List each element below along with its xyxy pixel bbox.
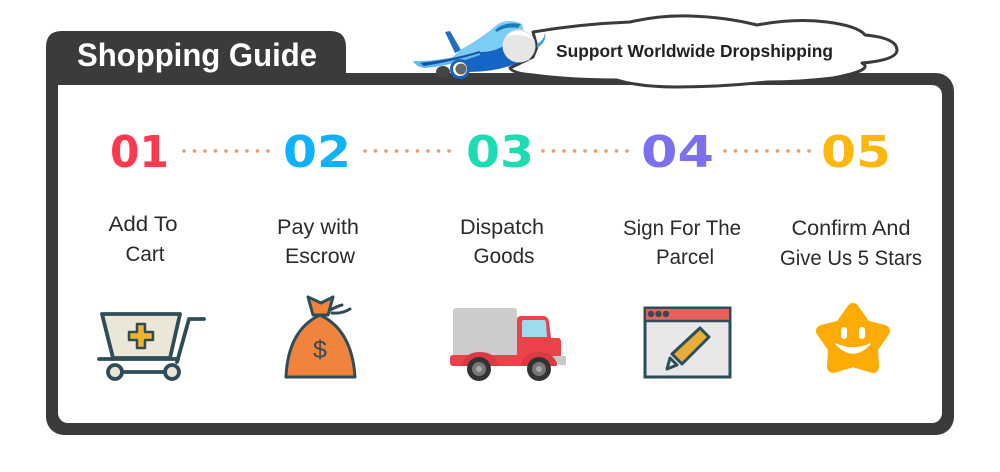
step 2 label — [277, 216, 359, 268]
step 5 label: Confirm And — [792, 217, 910, 240]
step 2 label: Pay with — [277, 216, 359, 239]
icon: delivery truck — [450, 308, 566, 381]
step 4 label: Sign For The — [623, 217, 741, 240]
step 1 label: Add To — [108, 213, 178, 236]
step 5 label — [780, 217, 922, 270]
step number 05: 05 — [821, 127, 891, 178]
icon: money bag: $ — [313, 336, 327, 364]
dotted connectors between steps — [184, 149, 811, 153]
step 3 label — [460, 216, 544, 268]
step 2 label: Escrow — [285, 245, 356, 268]
step number 02: 02 — [283, 127, 351, 178]
step 3 label: Goods — [474, 245, 534, 268]
panel: shopping guide frame — [46, 31, 954, 435]
step 3 label: Dispatch — [460, 216, 544, 239]
step number 01: 01 — [110, 127, 169, 178]
icon: airplane — [413, 21, 545, 79]
heading tab: Shopping Guide — [77, 37, 317, 73]
icon: shopping cart — [99, 314, 204, 379]
step 1 label — [108, 213, 178, 266]
icon: smiling star — [822, 309, 884, 367]
icon: money bag — [286, 297, 355, 377]
icon: browser window with pencil — [645, 308, 730, 377]
callout: cloud speech bubble — [510, 16, 897, 87]
step number 03: 03 — [466, 127, 534, 178]
heading tab — [46, 31, 358, 99]
step 4 label — [623, 217, 741, 269]
step 4 label: Parcel — [656, 246, 714, 269]
step 1 label: Cart — [126, 243, 165, 266]
callout: cloud speech bubble: Support Worldwide Dropshipping — [556, 41, 833, 61]
step 5 label: Give Us 5 Stars — [780, 247, 922, 270]
step number 04: 04 — [641, 127, 714, 178]
